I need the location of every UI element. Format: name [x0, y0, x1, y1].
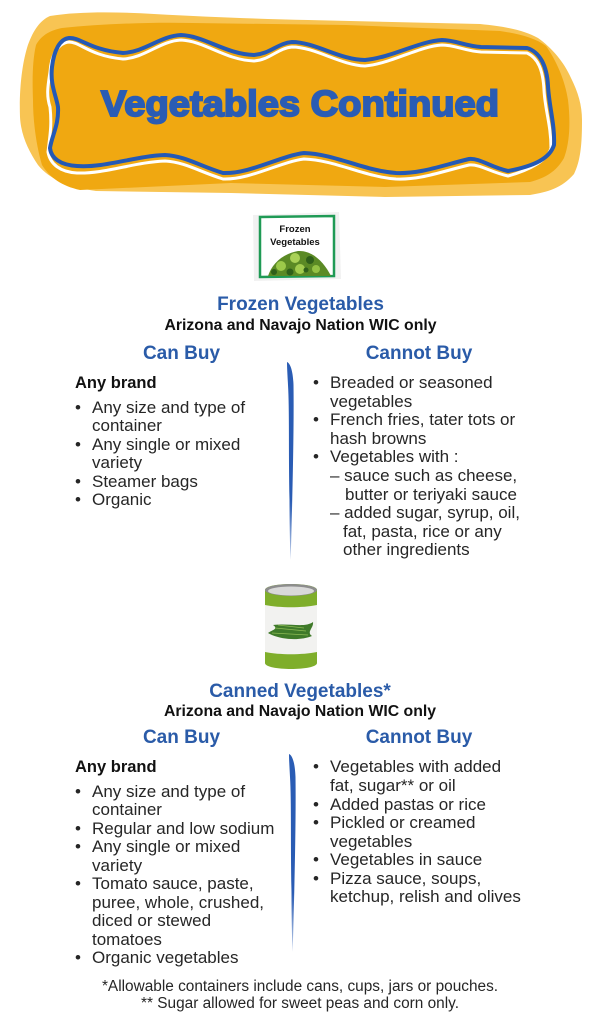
heading: can buy frozen: Can Buy	[143, 343, 220, 364]
divider: frozen brush stroke	[287, 362, 294, 560]
list: canned can buy: puree, whole, crushed,	[92, 893, 264, 912]
list: canned can buy	[75, 758, 274, 967]
wavy blue outline	[50, 35, 554, 173]
list: frozen can buy: container	[92, 416, 162, 435]
list: canned can buy: •	[75, 782, 81, 801]
list: frozen can buy: Any single or mixed	[92, 435, 240, 454]
list: canned can buy: tomatoes	[92, 930, 162, 949]
icon: frozen vegetables bag: Frozen	[279, 224, 311, 235]
footnotes: ** Sugar allowed for sweet peas and corn only.	[141, 995, 459, 1012]
list: frozen cannot buy: – sauce such as cheese,	[330, 466, 517, 485]
list: canned cannot buy: •	[313, 850, 319, 869]
list: canned cannot buy: Vegetables with added	[330, 757, 501, 776]
heading: can buy canned: Can Buy	[143, 727, 220, 748]
heading: cannot buy canned: Cannot Buy	[366, 727, 473, 748]
list: frozen cannot buy: •	[313, 373, 319, 392]
list: canned can buy: •	[75, 874, 81, 893]
list: frozen cannot buy: hash browns	[330, 429, 426, 448]
list: frozen cannot buy: vegetables	[330, 392, 412, 411]
list: frozen can buy: Any size and type of	[92, 398, 245, 417]
list: frozen cannot buy: Breaded or seasoned	[330, 373, 493, 392]
list: frozen can buy: variety	[92, 453, 143, 472]
list: canned can buy: •	[75, 948, 81, 967]
list: frozen cannot buy: French fries, tater tots or	[330, 410, 516, 429]
list: canned can buy: Any size and type of	[92, 782, 245, 801]
list: canned can buy: variety	[92, 856, 143, 875]
list: frozen cannot buy: fat, pasta, rice or any	[343, 522, 502, 541]
list: frozen cannot buy: •	[313, 410, 319, 429]
list: canned cannot buy: •	[313, 757, 319, 776]
footnotes	[102, 978, 498, 1012]
list: frozen can buy: •	[75, 435, 81, 454]
list: frozen cannot buy: other ingredients	[343, 540, 470, 559]
list: canned cannot buy: Pizza sauce, soups,	[330, 869, 481, 888]
list: canned cannot buy: vegetables	[330, 832, 412, 851]
list: frozen can buy: Steamer bags	[92, 472, 198, 491]
list: frozen can buy	[75, 374, 245, 509]
list: canned can buy: container	[92, 800, 162, 819]
heading: cannot buy frozen: Cannot Buy	[366, 343, 473, 364]
list: canned can buy: Organic vegetables	[92, 948, 238, 967]
heading: frozen vegetables: Frozen Vegetables	[217, 294, 384, 315]
list: canned cannot buy	[313, 757, 521, 906]
list: frozen cannot buy: •	[313, 447, 319, 466]
list: canned cannot buy: fat, sugar** or oil	[330, 776, 456, 795]
list: canned cannot buy: Added pastas or rice	[330, 795, 486, 814]
list: canned cannot buy: •	[313, 869, 319, 888]
list: frozen can buy: Organic	[92, 490, 152, 509]
icon: canned green beans	[265, 584, 317, 669]
list: frozen can buy: •	[75, 398, 81, 417]
list: canned can buy: Any brand	[75, 758, 157, 776]
list: frozen can buy: •	[75, 472, 81, 491]
list: canned cannot buy: ketchup, relish and olives	[330, 887, 521, 906]
list: canned can buy: Tomato sauce, paste,	[92, 874, 254, 893]
list: canned can buy: •	[75, 819, 81, 838]
list: canned cannot buy: Pickled or creamed	[330, 813, 476, 832]
title: Vegetables Continued	[101, 83, 499, 124]
list: canned can buy: diced or stewed	[92, 911, 211, 930]
list: canned cannot buy: Vegetables in sauce	[330, 850, 482, 869]
list: frozen cannot buy	[313, 373, 520, 559]
list: canned cannot buy: •	[313, 813, 319, 832]
icon: frozen vegetables bag: Vegetables	[270, 237, 320, 248]
footnotes: *Allowable containers include cans, cups, jars or pouches.	[102, 978, 498, 995]
icon: frozen vegetables bag	[253, 212, 341, 281]
list: canned can buy: Any single or mixed	[92, 837, 240, 856]
heading: canned vegetables: Canned Vegetables*	[209, 681, 391, 702]
list: canned can buy: Regular and low sodium	[92, 819, 274, 838]
title banner	[20, 12, 582, 197]
list: frozen cannot buy: – added sugar, syrup, oil,	[330, 503, 520, 522]
list: frozen cannot buy: Vegetables with :	[330, 447, 459, 466]
list: frozen can buy: •	[75, 490, 81, 509]
list: frozen cannot buy: butter or teriyaki sauce	[345, 485, 517, 504]
subheading: canned eligibility: Arizona and Navajo Nation WIC only	[164, 703, 436, 720]
subheading: frozen eligibility: Arizona and Navajo Nation WIC only	[164, 317, 437, 334]
list: canned can buy: •	[75, 837, 81, 856]
list: frozen can buy: Any brand	[75, 374, 157, 392]
list: canned cannot buy: •	[313, 795, 319, 814]
wavy white outline	[48, 40, 551, 179]
divider: canned brush stroke	[289, 754, 296, 952]
